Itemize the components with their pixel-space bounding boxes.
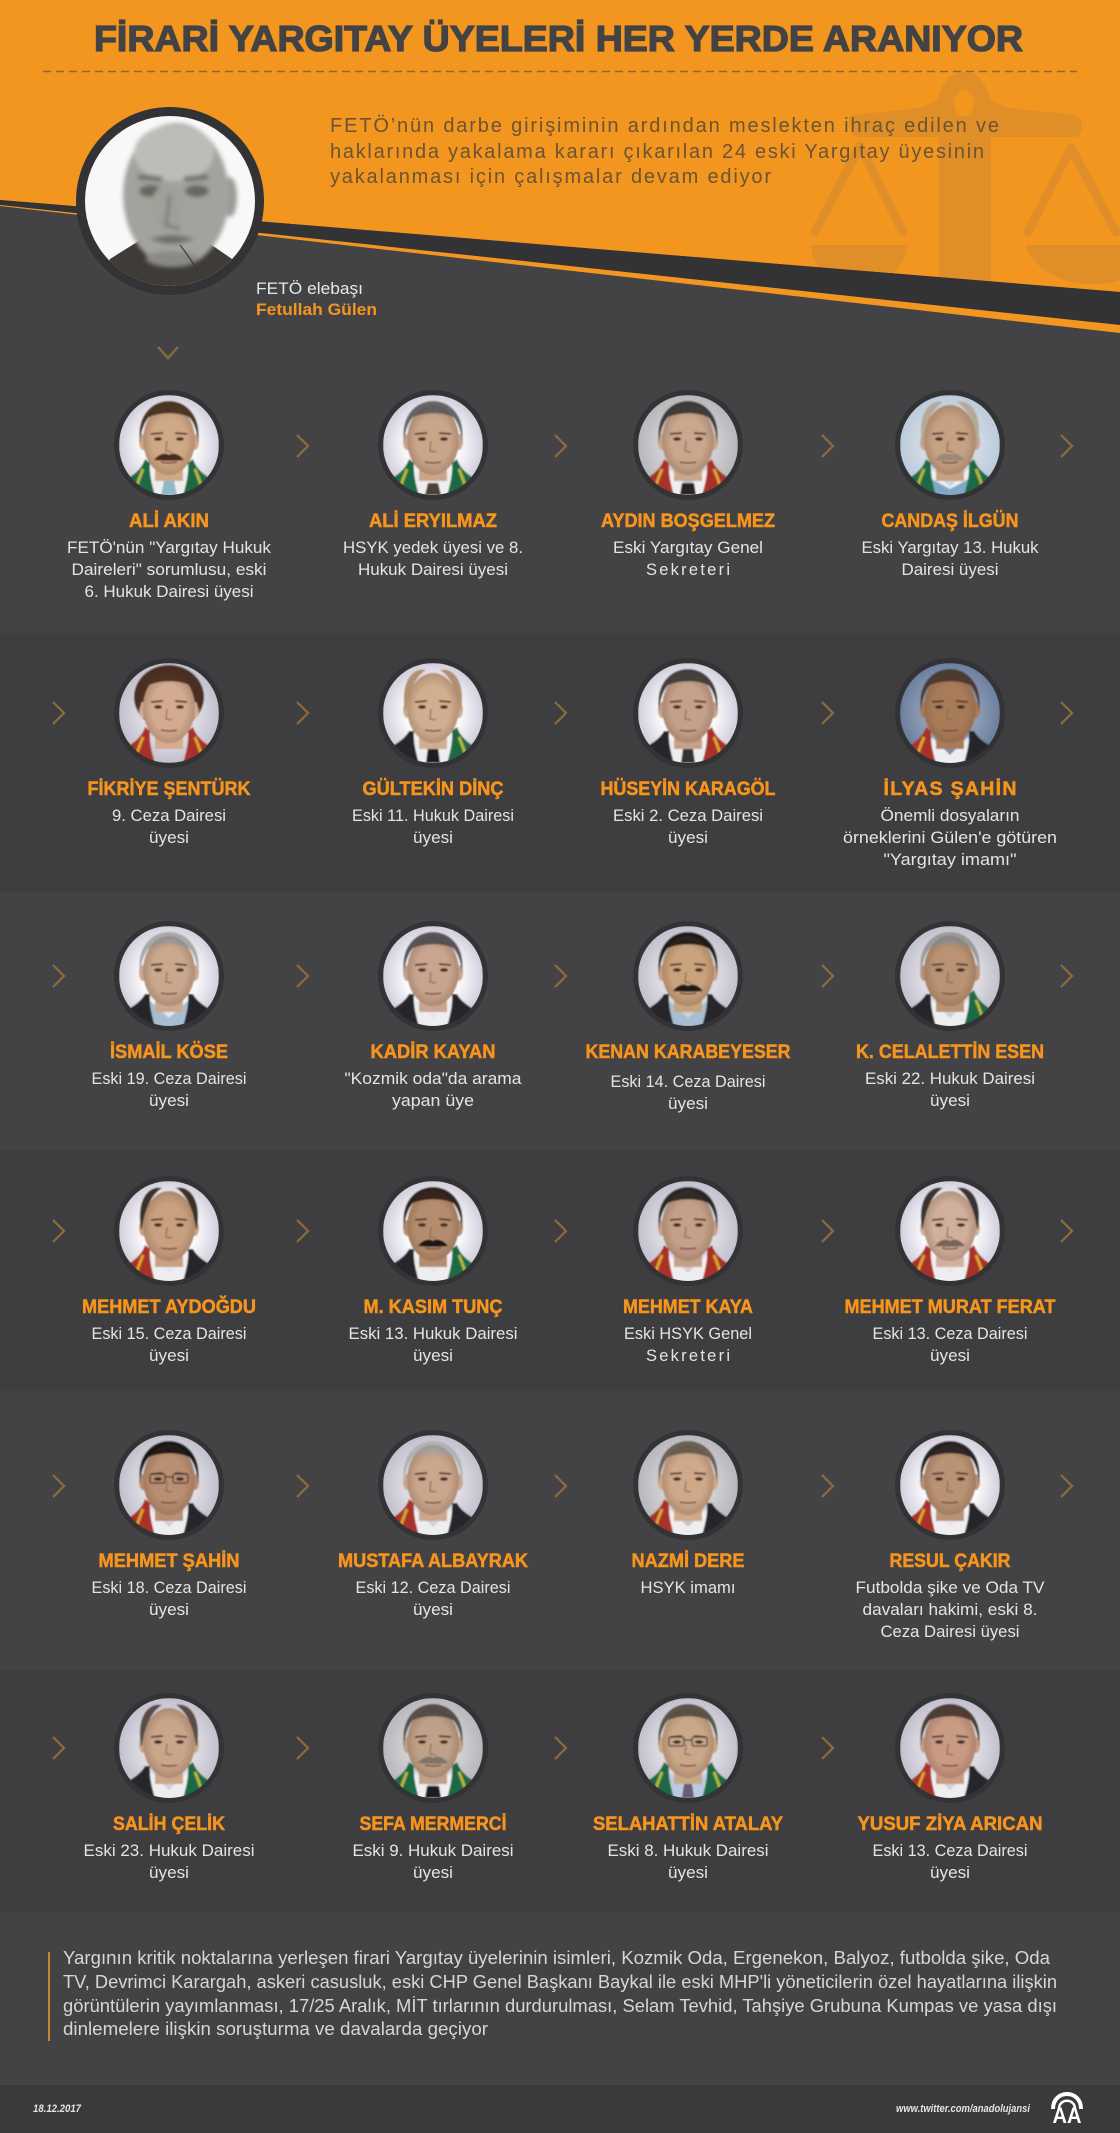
arrow [822, 702, 833, 724]
member: Candaş İlgün: Eski Yargıtay 13. Hukuk [862, 539, 1039, 557]
member: Gültekin Dinç: üyesi [413, 829, 453, 847]
member: İlyas Şahin: İLYAS ŞAHİN [884, 777, 1016, 800]
arrow [297, 1220, 308, 1242]
header background [0, 0, 1120, 340]
arrow [822, 1475, 833, 1497]
member: Yusuf Ziya Arıcan [858, 1693, 1042, 1882]
member: Mehmet Şahin: Eski 18. Ceza Dairesi [92, 1579, 246, 1597]
member: Sefa Mermerci: SEFA MERMERCİ [360, 1812, 506, 1835]
member: M. Kasım Tunç: M. KASIM TUNÇ [364, 1296, 502, 1318]
arrow [53, 1220, 64, 1242]
member: Selahattin Atalay: üyesi [668, 1864, 708, 1882]
member: Kadir Kayan: yapan üye [392, 1092, 474, 1110]
intro text: FETÖ’nün darbe girişiminin ardından meslekten ihraç edilen ve [330, 115, 999, 137]
member: Ali Eryılmaz: Hukuk Dairesi üyesi [358, 561, 508, 579]
member: Ali Eryılmaz [343, 390, 523, 579]
arrow [297, 435, 308, 457]
member: Yusuf Ziya Arıcan: Eski 13. Ceza Dairesi [872, 1842, 1028, 1860]
member: Resul Çakır: davaları hakimi, eski 8. [862, 1601, 1038, 1619]
member: İsmail Köse: üyesi [149, 1092, 189, 1110]
member: Mustafa Albayrak [338, 1430, 528, 1619]
arrow [297, 965, 308, 987]
member: Sefa Mermerci [352, 1693, 514, 1882]
member: Kenan Karabeyeser: Eski 14. Ceza Dairesi [610, 1073, 766, 1091]
footer [0, 2085, 1120, 2133]
member: İsmail Köse [92, 921, 246, 1110]
panel: row 2 [52, 658, 1074, 868]
member: Fikriye Şentürk: üyesi [149, 829, 189, 847]
member: Resul Çakır: Ceza Dairesi üyesi [880, 1623, 1020, 1641]
source url: www.twitter.com/anadolujansi [896, 2103, 1031, 2115]
member: Selahattin Atalay: SELAHATTİN ATALAY [593, 1812, 783, 1835]
member: Resul Çakır: Futbolda şike ve Oda TV [856, 1579, 1044, 1597]
member: Mehmet Kaya: Sekreteri [646, 1347, 730, 1365]
member: Yusuf Ziya Arıcan: YUSUF ZİYA ARICAN [858, 1812, 1042, 1835]
member: Mehmet Aydoğdu: üyesi [149, 1347, 189, 1365]
panel: row 5 [52, 1430, 1074, 1640]
member: Hüseyin Karagöl: HÜSEYİN KARAGÖL [600, 777, 776, 800]
arrow [822, 1737, 833, 1759]
member: Mehmet Şahin: MEHMET ŞAHİN [98, 1549, 240, 1572]
member: İlyas Şahin: örneklerini Gülen'e götüren [843, 829, 1057, 847]
arrow [555, 1475, 566, 1497]
panel: closing note [0, 1912, 1120, 2085]
member: Kenan Karabeyeser [586, 921, 790, 1113]
member: Salih Çelik: Eski 23. Hukuk Dairesi [84, 1842, 254, 1860]
member: Ali Eryılmaz: ALİ ERYILMAZ [369, 509, 497, 532]
arrow [555, 1737, 566, 1759]
member: Mehmet Murat Ferat: MEHMET MURAT FERAT [844, 1296, 1056, 1318]
member: Ali Akın: FETÖ'nün "Yargıtay Hukuk [67, 539, 272, 557]
member: Fikriye Şentürk [88, 658, 250, 847]
member: M. Kasım Tunç: üyesi [413, 1347, 453, 1365]
member: Mustafa Albayrak: üyesi [413, 1601, 453, 1619]
member: Kadir Kayan: KADİR KAYAN [370, 1040, 496, 1063]
closing text: TV, Devrimci Karargah, askeri casusluk, eski CHP Genel Başkanı Baykal ile eski MHP'li yöneticilerin özel hayatlarına ilişkin [63, 1972, 1057, 1992]
member: Mehmet Murat Ferat: Eski 13. Ceza Dairesi [872, 1325, 1028, 1343]
intro text: yakalanması için çalışmalar devam ediyor [330, 166, 771, 188]
arrow [555, 435, 566, 457]
panel: row 4 [52, 1176, 1074, 1364]
member: Ali Eryılmaz: HSYK yedek üyesi ve 8. [343, 539, 523, 557]
member: Kenan Karabeyeser: KENAN KARABEYESER [586, 1041, 790, 1063]
member: İlyas Şahin: Önemli dosyaların [880, 807, 1020, 825]
member: Mehmet Kaya: MEHMET KAYA [623, 1296, 753, 1318]
member: Ali Akın: Daireleri" sorumlusu, eski [72, 561, 266, 579]
caption: FETÖ elebaşı [256, 279, 377, 319]
member: Nazmi Dere [632, 1430, 744, 1597]
member: Mehmet Şahin: üyesi [149, 1601, 189, 1619]
member: Resul Çakır [856, 1430, 1044, 1641]
member: Selahattin Atalay [593, 1693, 783, 1882]
arrow [297, 702, 308, 724]
member: Aydın Boşgelmez: Sekreteri [646, 561, 730, 579]
arrow [555, 702, 566, 724]
member: Mehmet Murat Ferat: üyesi [930, 1347, 970, 1365]
arrow [1061, 702, 1072, 724]
member: K. Celalettin Esen: Eski 22. Hukuk Dairesi [865, 1070, 1035, 1088]
member: Yusuf Ziya Arıcan: üyesi [930, 1864, 970, 1882]
intro text: haklarında yakalama kararı çıkarılan 24 eski Yargıtay üyesinin [330, 141, 984, 163]
member: Nazmi Dere: HSYK imamı [640, 1579, 736, 1597]
member: Gültekin Dinç [352, 658, 514, 847]
arrow [297, 1737, 308, 1759]
arrow [555, 1220, 566, 1242]
arrow [555, 965, 566, 987]
arrow [1061, 1220, 1072, 1242]
member: Aydın Boşgelmez [601, 390, 775, 579]
icon: scales of justice watermark [811, 72, 1120, 300]
date: 18.12.2017 [33, 2103, 82, 2115]
closing text: görüntülerin yayımlanması, 17/25 Aralık, MİT tırlarının durdurulması, Selam Tevhid, Tahşiye Grubuna Kumpas ve yasa dışı [63, 1996, 1057, 2016]
closing text [63, 1948, 1057, 2039]
intro text [330, 115, 999, 188]
member: İlyas Şahin: "Yargıtay imamı" [884, 851, 1017, 869]
caption: FETÖ elebaşı: FETÖ elebaşı [256, 279, 363, 298]
diagonal orange stripe [0, 205, 1120, 333]
member: Hüseyin Karagöl: üyesi [668, 829, 708, 847]
member: K. Celalettin Esen [856, 921, 1044, 1110]
member: Aydın Boşgelmez: Eski Yargıtay Genel [613, 539, 763, 557]
closing text: Yargının kritik noktalarına yerleşen firari Yargıtay üyelerinin isimleri, Kozmik Oda, Ergenekon, Balyoz, futbolda şike, Oda [63, 1948, 1051, 1968]
member: Candaş İlgün [862, 390, 1039, 579]
member: İlyas Şahin [843, 658, 1057, 869]
arrow: down chevron [158, 347, 178, 358]
arrow [53, 1475, 64, 1497]
member: Hüseyin Karagöl [600, 658, 776, 847]
closing text: dinlemelere ilişkin soruşturma ve davalarda geçiyor [63, 2019, 488, 2039]
member: Mehmet Kaya: Eski HSYK Genel [624, 1325, 752, 1343]
member: Candaş İlgün: CANDAŞ İLGÜN [882, 509, 1018, 532]
member: Aydın Boşgelmez: AYDIN BOŞGELMEZ [601, 510, 775, 532]
member: Hüseyin Karagöl: Eski 2. Ceza Dairesi [613, 807, 763, 825]
member: Kadir Kayan: "Kozmik oda"da arama [344, 1070, 522, 1088]
member: M. Kasım Tunç: Eski 13. Hukuk Dairesi [348, 1325, 518, 1343]
member: Candaş İlgün: Dairesi üyesi [902, 561, 998, 579]
icon: AA logo [1052, 2094, 1082, 2128]
arrow [53, 702, 64, 724]
member: Ali Akın: ALİ AKIN [129, 509, 209, 532]
member: Ali Akın [67, 390, 272, 601]
member: Kadir Kayan [344, 921, 522, 1110]
member: Fikriye Şentürk: FİKRİYE ŞENTÜRK [88, 777, 250, 800]
member: Salih Çelik: SALİH ÇELİK [113, 1812, 225, 1835]
member: Mustafa Albayrak: Eski 12. Ceza Dairesi [356, 1579, 510, 1597]
member: Gültekin Dinç: GÜLTEKİN DİNÇ [362, 777, 504, 800]
diagonal dark band [0, 200, 1120, 325]
arrow [822, 1220, 833, 1242]
arrow [1061, 965, 1072, 987]
arrow [1061, 435, 1072, 457]
panel: row 6 [52, 1693, 1042, 1882]
arrow [53, 965, 64, 987]
member: Mehmet Aydoğdu: MEHMET AYDOĞDU [82, 1295, 256, 1318]
panel: row 1 [68, 390, 1074, 600]
member: Mehmet Kaya [623, 1176, 753, 1365]
title: FİRARİ YARGITAY ÜYELERİ HER YERDE ARANIYOR [94, 18, 1023, 59]
arrow [53, 1737, 64, 1759]
arrow [297, 1475, 308, 1497]
member: Fikriye Şentürk: 9. Ceza Dairesi [112, 807, 226, 825]
member: Salih Çelik [84, 1693, 254, 1882]
member: Nazmi Dere: NAZMİ DERE [632, 1549, 744, 1572]
arrow [1061, 1475, 1072, 1497]
portrait: Fetullah Gülen [76, 107, 264, 295]
icon: AA logo: AA [1052, 2103, 1082, 2128]
member: Kenan Karabeyeser: üyesi [668, 1095, 708, 1113]
member: Resul Çakır: RESUL ÇAKIR [890, 1550, 1010, 1572]
member: Salih Çelik: üyesi [149, 1864, 189, 1882]
caption: FETÖ elebaşı: Fetullah Gülen [256, 300, 377, 319]
member: Mehmet Aydoğdu [82, 1176, 256, 1365]
member: Sefa Mermerci: Eski 9. Hukuk Dairesi [352, 1842, 514, 1860]
panel: row 3 [52, 921, 1074, 1112]
arrow [822, 965, 833, 987]
member: Mehmet Şahin [92, 1430, 246, 1619]
member: K. Celalettin Esen: üyesi [930, 1092, 970, 1110]
member: Mehmet Murat Ferat [844, 1176, 1056, 1365]
arrow [822, 435, 833, 457]
member: Mustafa Albayrak: MUSTAFA ALBAYRAK [338, 1550, 528, 1572]
member: Gültekin Dinç: Eski 11. Hukuk Dairesi [352, 807, 514, 825]
member: Ali Akın: 6. Hukuk Dairesi üyesi [84, 583, 254, 601]
member: Sefa Mermerci: üyesi [413, 1864, 453, 1882]
member: İsmail Köse: İSMAİL KÖSE [110, 1040, 228, 1063]
member: M. Kasım Tunç [348, 1176, 518, 1365]
member: Mehmet Aydoğdu: Eski 15. Ceza Dairesi [92, 1325, 246, 1343]
member: Selahattin Atalay: Eski 8. Hukuk Dairesi [608, 1842, 768, 1860]
member: İsmail Köse: Eski 19. Ceza Dairesi [92, 1070, 246, 1088]
member: K. Celalettin Esen: K. CELALETTİN ESEN [856, 1040, 1044, 1063]
